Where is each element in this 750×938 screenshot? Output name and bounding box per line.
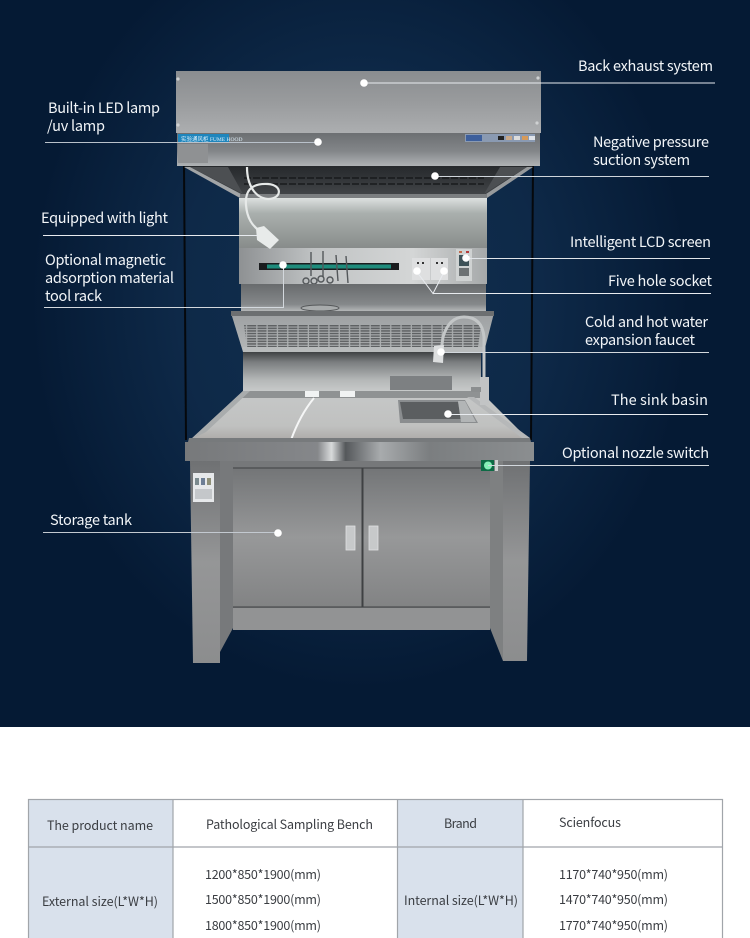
row: product name and brand: The product name (47, 815, 153, 834)
row: product name and brand: Brand (444, 813, 477, 832)
callout: magnetic tool rack: tool rack (45, 285, 102, 306)
callout: equipped with light: Equipped with light (41, 207, 169, 228)
callout: five hole socket (413, 267, 713, 294)
callout: storage tank (43, 509, 282, 537)
callout: magnetic tool rack (44, 249, 287, 308)
table grid (28, 799, 723, 938)
row: sizes: 1170*740*950(mm) (559, 864, 668, 883)
callout: LED lamp: /uv lamp (47, 115, 105, 136)
lower back panel (241, 284, 486, 313)
cabinet interior frame (220, 461, 504, 608)
hood lower panel with labels (177, 133, 540, 166)
row: sizes: 1770*740*950(mm) (559, 915, 668, 934)
row: sizes (42, 864, 668, 934)
stainless worktop (188, 391, 531, 442)
row: product name and brand: Scienfocus (559, 812, 621, 831)
splash back (243, 352, 481, 392)
sink basin (398, 400, 478, 423)
under-hood suction section (184, 166, 533, 198)
row: sizes: 1470*740*950(mm) (559, 889, 668, 908)
callout: LCD screen: Intelligent LCD screen (570, 231, 711, 252)
row: product name and brand: Pathological Sampling Bench (206, 814, 373, 833)
callout: faucet: expansion faucet (585, 329, 696, 350)
water faucet (433, 317, 489, 405)
callout: LCD screen (462, 231, 711, 262)
table label cells (28, 799, 523, 938)
background centre glow (0, 0, 750, 727)
callout: LED lamp (45, 97, 322, 146)
white lower section (0, 727, 750, 938)
callout: storage tank: Storage tank (50, 509, 132, 530)
callout: back exhaust system (360, 55, 715, 87)
row: product name and brand (47, 812, 621, 834)
right door (363, 468, 492, 607)
callout: magnetic tool rack: Optional magnetic (45, 249, 166, 270)
row: sizes: Internal size(L*W*H) (404, 890, 518, 909)
bottom cross bar (233, 608, 490, 630)
tray on shelf (301, 305, 339, 311)
callout: sink basin (444, 389, 708, 418)
callout: sink basin: The sink basin (611, 389, 708, 410)
callout: negative pressure (431, 131, 709, 180)
left door (232, 468, 362, 607)
glass side frames (184, 166, 533, 440)
back panel (239, 198, 487, 248)
callout: nozzle switch: Optional nozzle switch (562, 442, 709, 463)
row: sizes: 1200*850*1900(mm) (205, 864, 321, 883)
louvered shelf vent (231, 311, 494, 352)
right leg (490, 461, 530, 661)
callout: magnetic tool rack: adsorption material (45, 267, 174, 288)
instruction sticker (193, 473, 214, 502)
hood lower panel with labels: 实验通风柜 FUME HOOD (181, 135, 242, 143)
row: sizes: 1800*850*1900(mm) (205, 915, 321, 934)
specification table (28, 799, 723, 938)
magnetic tool rack (259, 251, 399, 284)
product illustration: sampling bench (176, 71, 541, 663)
worktop front edge (185, 442, 534, 461)
tool band (239, 248, 487, 284)
green nozzle switch (481, 460, 498, 471)
callout: five hole socket: Five hole socket (608, 270, 713, 291)
callout: back exhaust system: Back exhaust system (578, 55, 713, 76)
callout: LED lamp: Built-in LED lamp (48, 97, 160, 118)
exhaust hood upper panel (176, 71, 541, 133)
left leg (190, 461, 233, 663)
dark navy background panel (0, 0, 750, 727)
callout: faucet: Cold and hot water (585, 311, 708, 332)
callout: negative pressure: suction system (593, 149, 690, 170)
row: sizes: External size(L*W*H) (42, 891, 158, 910)
five hole sockets (412, 258, 448, 280)
LCD control screen (456, 249, 472, 281)
light fixture with cable (246, 167, 279, 249)
row: sizes: 1500*850*1900(mm) (205, 889, 321, 908)
callout: faucet (437, 311, 709, 356)
callout: negative pressure: Negative pressure (593, 131, 709, 152)
